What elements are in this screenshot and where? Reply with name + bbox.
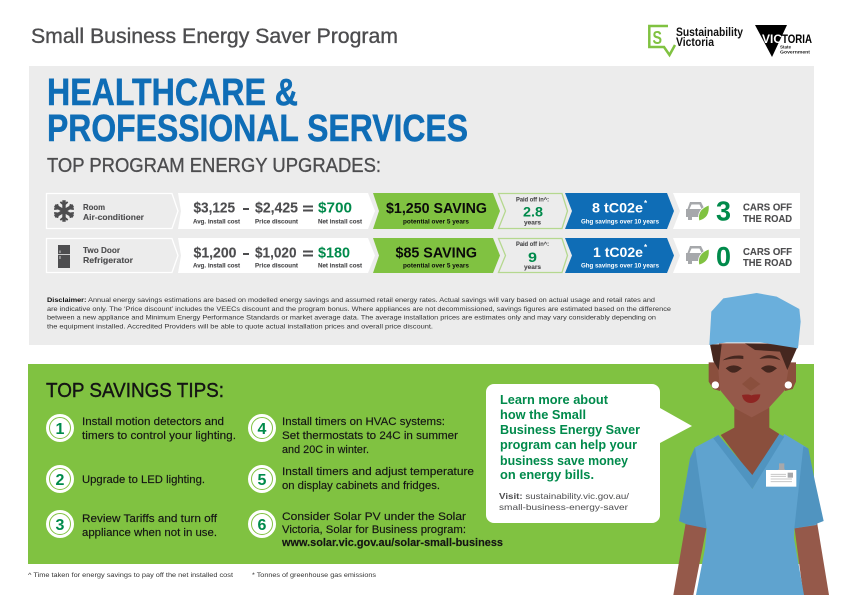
tip 4: Set thermostats to 24C in summer: [282, 430, 458, 442]
logo: Victoria State Government: VIC: [762, 34, 782, 46]
saving chevron: $85 SAVING: [396, 246, 477, 262]
nose: [742, 377, 760, 391]
cost equation: $180: [318, 244, 350, 262]
panel: top savings tips: [28, 364, 814, 564]
tip 6: [249, 511, 503, 549]
tip 3: 3: [56, 517, 65, 534]
cars off the road: 0: [716, 241, 731, 272]
heading: healthcare and professional services: PROFESSIONAL SERVICES: [47, 108, 468, 150]
cars off the road: 3: [716, 196, 731, 227]
emissions chevron: *: [644, 243, 648, 252]
hat: [709, 293, 801, 348]
saving chevron: potential over 5 years: [403, 218, 469, 226]
payback chevron: [498, 194, 568, 228]
saving chevron: [373, 238, 500, 273]
logo: Victoria State Government: Government: [780, 50, 811, 54]
appliance label: two door refrigerator: [46, 238, 178, 272]
emissions chevron: Ghg savings over 10 years: [581, 219, 659, 226]
cost equation: Net install cost: [318, 219, 363, 226]
page title: Small Business Energy Saver Program: [31, 25, 398, 48]
eyebrows: [723, 355, 781, 360]
id badge: [766, 463, 796, 487]
cars off the road: CARS OFF: [743, 203, 792, 214]
cost equation: [178, 238, 375, 273]
disclaimer: are indicative only. The ‘Price discount’ includes the VEECs discount and the program bonus. Where appliances are not decommissioned, savings figures are estimated based on the difference: [47, 306, 671, 313]
tip 1: [47, 415, 236, 442]
logo: Victoria State Government: State: [780, 44, 791, 50]
payback chevron: Paid off in^:: [516, 197, 549, 204]
payback chevron: years: [524, 264, 542, 271]
panel: energy upgrades: [29, 66, 814, 345]
appliance label: two door refrigerator: Refrigerator: [83, 255, 134, 265]
tip 4: Install timers on HVAC systems:: [282, 416, 445, 428]
tip 5: 5: [258, 472, 267, 489]
sleeves: [679, 446, 824, 528]
eyes: [726, 365, 777, 373]
cost equation: Price discount: [255, 263, 299, 270]
tip 3: appliance when not in use.: [82, 527, 217, 539]
callout: learn more: on energy bills.: [500, 468, 594, 482]
callout: learn more: program can help your: [500, 438, 637, 452]
tip 1: timers to control your lighting.: [82, 430, 236, 442]
heading: top savings tips: TOP SAVINGS TIPS:: [46, 380, 224, 402]
callout: learn more: how the Small: [500, 408, 586, 422]
callout: learn more: small-business-energy-saver: [499, 502, 628, 512]
cars off the road: [673, 238, 800, 273]
emissions chevron: [565, 238, 674, 273]
tip 6: Consider Solar PV under the Solar: [282, 511, 466, 523]
logo: Sustainability Victoria: [649, 26, 744, 55]
tip 6: 6: [258, 517, 267, 534]
collar: [713, 434, 784, 489]
payback chevron: Paid off in^:: [516, 241, 549, 248]
cost equation: $1,020: [255, 244, 296, 262]
cars off the road: THE ROAD: [743, 214, 792, 225]
tip 5: Install timers and adjust temperature: [282, 466, 474, 478]
saving chevron: [373, 193, 500, 229]
earrings: [712, 381, 792, 389]
tip 5: on display cabinets and fridges.: [282, 480, 440, 492]
cost equation: Avg. install cost: [193, 219, 241, 226]
arms: [673, 520, 829, 595]
scrubs top: [679, 434, 817, 595]
footnotes: ^ Time taken for energy savings to pay off the net installed cost: [28, 572, 233, 579]
callout: learn more: Visit: sustainability.vic.gov.au/: [499, 491, 630, 501]
callout: learn more: business save money: [500, 454, 628, 468]
emissions chevron: *: [644, 199, 648, 208]
appliance label: room air-conditioner: [46, 194, 178, 228]
cost equation: Net install cost: [318, 263, 363, 270]
tip 2: [47, 466, 205, 492]
cars off the road: THE ROAD: [743, 258, 792, 269]
mouth: [742, 394, 760, 403]
tip 2: 2: [56, 472, 65, 489]
hair: [710, 343, 798, 370]
tip 2: Upgrade to LED lighting.: [82, 474, 205, 486]
saving chevron: $1,250 SAVING: [386, 201, 487, 217]
row: room air-conditioner: [46, 193, 800, 229]
heading: healthcare and professional services: HEALTHCARE &: [47, 72, 298, 114]
ears: [709, 362, 796, 391]
cars off the road: CARS OFF: [743, 247, 792, 258]
cost equation: [178, 193, 375, 229]
cost equation: Avg. install cost: [193, 263, 241, 270]
logo: Victoria State Government: [755, 25, 812, 57]
disclaimer: the equipment installed. Accredited Providers will be able to quote actual installation prices and overall price discount.: [47, 324, 433, 330]
emissions chevron: 1 tC02e: [593, 244, 643, 260]
tip 4: [249, 415, 458, 456]
cars off the road: [673, 193, 800, 229]
payback chevron: 2.8: [523, 205, 544, 220]
payback chevron: years: [524, 220, 542, 226]
logo: Sustainability Victoria: S: [652, 28, 662, 48]
icon: car with leaf: [686, 202, 709, 221]
payback chevron: [498, 238, 568, 272]
callout: learn more: [486, 384, 692, 523]
row: two door refrigerator: [46, 238, 800, 273]
tip 1: Install motion detectors and: [82, 416, 224, 428]
emissions chevron: Ghg savings over 10 years: [581, 263, 659, 270]
icon: refrigerator: [58, 245, 70, 268]
tip 6: www.solar.vic.gov.au/solar-small-business: [281, 537, 503, 549]
disclaimer: Disclaimer: Annual energy savings estimations are based on modelled energy savings and assumed retail energy rates. Actual savings will vary based on actual usage and retail rates and: [47, 297, 655, 304]
neck and chest: [721, 398, 779, 477]
saving chevron: potential over 5 years: [403, 263, 469, 270]
tip 5: [249, 466, 474, 492]
tip 4: and 20C in winter.: [282, 444, 369, 456]
appliance label: room air-conditioner: Room: [83, 202, 105, 212]
cost equation: $700: [318, 200, 352, 217]
appliance label: room air-conditioner: Air-conditioner: [83, 212, 145, 222]
footnotes: [28, 572, 377, 579]
cost equation: $3,125: [194, 200, 235, 217]
cost equation: Price discount: [255, 219, 299, 226]
callout: learn more: Learn more about: [500, 393, 609, 407]
face: [718, 343, 788, 417]
footnotes: * Tonnes of greenhouse gas emissions: [252, 572, 377, 579]
emissions chevron: [565, 193, 674, 229]
logo: Victoria State Government: TORIA: [782, 34, 812, 46]
cost equation: $1,200: [194, 244, 236, 262]
icon: car with leaf: [686, 246, 709, 265]
callout: learn more: Business Energy Saver: [500, 423, 640, 437]
emissions chevron: 8 tC02e: [592, 200, 643, 216]
tip 3: Review Tariffs and turn off: [82, 513, 218, 525]
tip 1: 1: [56, 421, 65, 438]
appliance label: two door refrigerator: Two Door: [83, 245, 121, 255]
illustration: nurse: [673, 293, 829, 595]
disclaimer: [47, 297, 671, 330]
tip 3: [47, 511, 218, 539]
disclaimer: between a new appliance and Minimum Energy Performance Standards or market average data. The average installation prices are estimates only and may vary considerably depending on: [47, 314, 656, 322]
tip 6: Victoria, Solar for Business program:: [282, 524, 466, 536]
logo: Sustainability Victoria: Victoria: [676, 37, 715, 49]
tip 4: 4: [258, 421, 267, 438]
subheading: top program energy upgrades: TOP PROGRAM ENERGY UPGRADES:: [47, 154, 381, 177]
cost equation: $2,425: [255, 200, 298, 217]
logo: Sustainability Victoria: Sustainability: [676, 27, 744, 39]
payback chevron: 9: [528, 250, 537, 265]
icon: snowflake: [55, 202, 73, 220]
heading: healthcare and professional services: [47, 72, 468, 150]
